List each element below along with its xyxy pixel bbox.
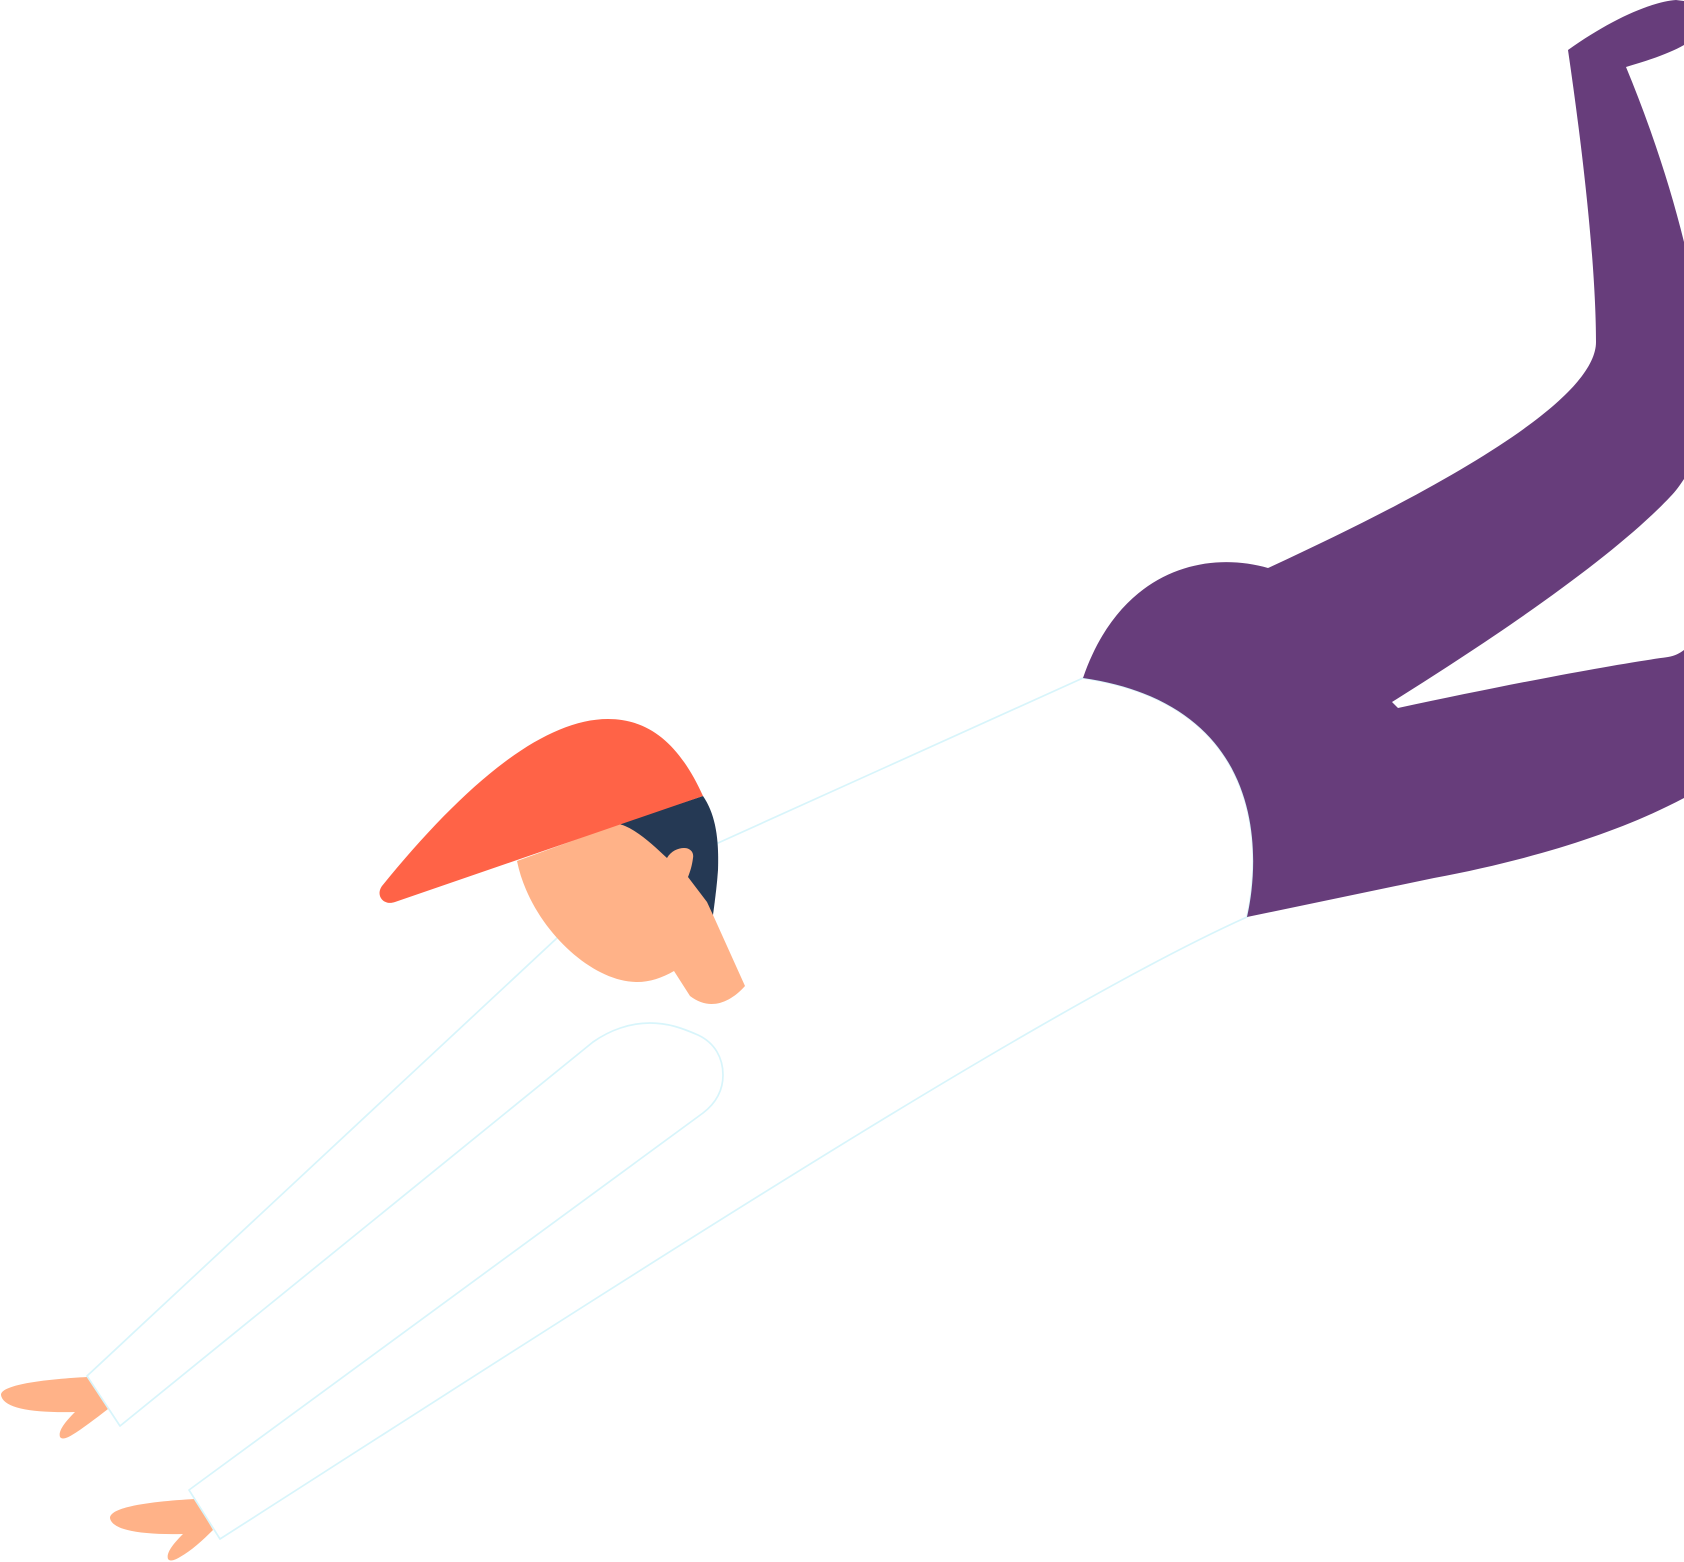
shirt body and back sleeve outline: [87, 678, 1253, 1539]
hand: front arm: [110, 1499, 213, 1560]
trousers and feet: [1083, 0, 1684, 917]
hair: [619, 796, 718, 915]
cap: [380, 719, 703, 903]
face, ear and neck: [517, 824, 745, 1004]
hand: back arm: [1, 1377, 108, 1438]
